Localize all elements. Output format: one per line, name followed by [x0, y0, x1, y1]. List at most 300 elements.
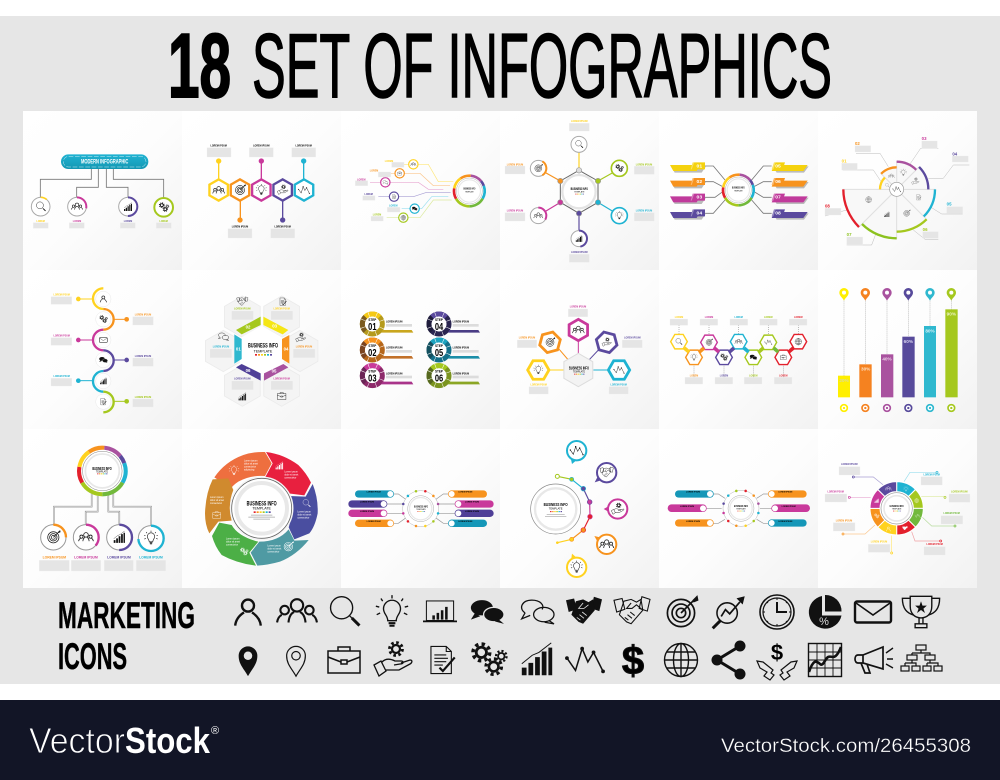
node: search	[31, 197, 50, 228]
captions: LOREM IPSUM	[610, 384, 627, 386]
connector lines	[54, 493, 151, 526]
center ring	[402, 490, 439, 527]
bar 80%: 80%	[925, 328, 936, 333]
captions	[505, 121, 654, 262]
step 03: 03	[368, 374, 377, 385]
panel 13: ring org tree	[39, 438, 166, 571]
petal captions: LOREM IPSUM	[234, 379, 251, 381]
icon: dollar: $	[622, 639, 644, 683]
captions: LOREM	[705, 317, 713, 319]
footer logo: ®	[211, 725, 219, 737]
segment: red	[265, 452, 311, 495]
leader lines	[825, 148, 969, 245]
colored arc	[557, 476, 590, 543]
icon: solid chat	[471, 600, 504, 624]
captions: LOREM IPSUM	[571, 252, 588, 254]
center disc	[230, 477, 293, 540]
captions: LOREM	[357, 179, 366, 181]
captions: LOREM IPSUM	[871, 542, 887, 544]
ribbon numbers: 07	[775, 195, 781, 201]
outer node: target	[527, 157, 549, 179]
node: gears: LOREM	[159, 221, 168, 223]
pills right	[448, 490, 494, 527]
petal captions: LOREM IPSUM	[273, 309, 290, 311]
icon: outline pin	[287, 646, 305, 676]
hexagon: hand gear	[595, 330, 618, 355]
end dots	[76, 297, 129, 404]
captions: LOREM	[373, 215, 381, 217]
bar 60%: 60%	[904, 339, 914, 344]
captions: LOREM IPSUM	[139, 556, 163, 560]
upper hexagons	[669, 331, 809, 353]
center text	[248, 343, 278, 356]
dotted leaders	[844, 301, 951, 376]
hexagon: team	[569, 319, 588, 341]
band numbers	[236, 323, 289, 374]
captions: LOREM	[779, 375, 788, 377]
hexagon: bulb	[525, 356, 552, 384]
icon: pie chart: %	[819, 616, 829, 628]
captions: LOREM IPSUM	[570, 307, 586, 309]
ribbon numbers: 08	[775, 210, 781, 216]
captions: LOREM IPSUM	[135, 315, 151, 317]
donut icons	[875, 486, 920, 531]
step 02: 02	[368, 348, 377, 359]
captions: LOREM IPSUM	[943, 513, 960, 515]
icon: hands with dollar	[757, 640, 797, 680]
captions: LOREM	[675, 317, 683, 319]
pill end caps	[700, 491, 778, 526]
panel backgrounds grid	[23, 111, 977, 588]
central hexagon	[558, 168, 601, 216]
node: search: LOREM	[36, 221, 45, 223]
bar 90%: 90%	[947, 312, 957, 317]
captions: LOREM	[385, 161, 393, 163]
pill labels	[680, 492, 796, 523]
center disc: BUSINESS INFO	[247, 501, 277, 508]
ring: business info: TEMPLATE	[465, 190, 475, 193]
white copy: dolor sit amet	[284, 473, 299, 476]
serpentine arcs and stems	[78, 288, 127, 412]
connector lines	[707, 494, 775, 523]
dotted leaders	[679, 325, 798, 377]
panel 10: radial hexagons	[517, 307, 642, 394]
step 03	[358, 362, 386, 390]
pills left	[348, 490, 394, 527]
white copy: consectetur	[244, 465, 256, 468]
panel 12: bar chart	[838, 288, 958, 411]
icon: solid handshake	[566, 597, 602, 624]
pill end caps	[380, 491, 462, 527]
left circle: BUSINESS INFO	[544, 502, 568, 508]
fan captions: 01	[842, 158, 847, 163]
center ring: BUSINESS INFO	[414, 504, 428, 508]
captions: LOREM IPSUM	[53, 294, 70, 296]
icon: team	[277, 599, 317, 622]
fan captions: 02	[855, 141, 860, 146]
connector lines	[705, 166, 772, 213]
ribbon numbers: 01	[697, 163, 702, 169]
step 03: STEP	[368, 369, 377, 374]
ribbon numbers: 03	[697, 195, 702, 201]
center ring: TEMPLATE	[734, 189, 744, 192]
panel 16: bubble arc	[531, 441, 627, 577]
bubble: hand gear	[604, 499, 627, 519]
band numbers: 02	[246, 325, 251, 330]
captions: LOREM	[720, 375, 728, 377]
captions: LOREM IPSUM	[636, 164, 652, 166]
captions: LOREM IPSUM	[951, 491, 968, 493]
icon discs	[96, 291, 111, 409]
pill labels: LOREM IPSUM	[686, 521, 700, 523]
icon: search	[331, 597, 359, 626]
panel 7: serpentine timeline	[51, 288, 153, 412]
hexagon: zigzag	[606, 356, 632, 384]
icon: gears	[473, 644, 507, 674]
spokes	[545, 152, 613, 232]
icon: bar growth	[522, 643, 552, 675]
captions	[51, 294, 153, 407]
icon: trophy	[902, 596, 940, 628]
row 1 left: modern infographic, hexagon chain, circuit lines	[31, 145, 491, 238]
central hexagon: TEMPLATE	[573, 371, 586, 374]
white copy: Lorem ipsum	[297, 510, 311, 513]
step labels: LOREM IPSUM	[453, 322, 469, 324]
connector lines	[387, 494, 455, 523]
step 02	[358, 336, 386, 364]
petal captions: LOREM IPSUM	[273, 379, 290, 381]
footer logo: Stock	[125, 720, 211, 761]
panel 14: arrow cycle	[205, 452, 318, 566]
step label lines	[386, 324, 479, 378]
panel 9: six step rings	[358, 310, 480, 390]
zigzag connectors	[684, 348, 793, 352]
left circle: TEMPLATE	[549, 506, 563, 510]
captions: LOREM IPSUM	[295, 145, 312, 147]
pill labels	[360, 492, 479, 523]
colored bands	[234, 317, 289, 381]
step labels: LOREM IPSUM	[386, 373, 402, 375]
row 2 right: radial hexagons, hexagon zigzag, bar chart	[517, 288, 958, 411]
connector lines	[40, 168, 164, 198]
center ring: TEMPLATE	[736, 508, 747, 511]
captions: LOREM	[690, 375, 698, 377]
step 06	[425, 362, 453, 390]
pill labels: LOREM IPSUM	[458, 492, 473, 494]
panel 3: circuit lines to ring	[355, 160, 491, 222]
step 01: 01	[368, 322, 377, 333]
outer node: team	[530, 208, 546, 224]
center text: TEMPLATE	[254, 349, 273, 353]
step 04	[425, 310, 453, 338]
icon: megaphone	[855, 647, 893, 673]
petal captions: LOREM IPSUM	[296, 347, 312, 349]
icon: clock	[760, 595, 794, 629]
leader lines	[843, 472, 955, 553]
heading: marketing icons: MARKETING	[58, 595, 195, 636]
captions: LOREM IPSUM	[507, 211, 523, 213]
icon: outline chat	[522, 600, 554, 624]
icon row 1	[235, 595, 940, 629]
banner: modern infographic: MODERN INFOGRAPHIC	[81, 160, 129, 166]
banner: modern infographic	[61, 154, 148, 169]
outer node: bars	[571, 231, 587, 247]
fan captions: 06	[923, 227, 928, 232]
segment: orange	[214, 452, 272, 488]
node: gears	[154, 198, 173, 228]
captions: LOREM IPSUM	[571, 121, 588, 123]
white copy: Lorem ipsum	[210, 496, 224, 499]
pill labels: LOREM IPSUM	[465, 502, 479, 504]
white copy: Lorem ipsum	[267, 545, 281, 548]
fan arcs	[843, 162, 935, 238]
center ring	[717, 168, 760, 212]
small nodes	[381, 160, 419, 222]
icon: pie chart	[809, 595, 842, 629]
white copy: Lorem ipsum	[284, 470, 298, 473]
fan captions: 05	[947, 202, 952, 207]
donut segments	[870, 482, 923, 535]
step labels: LOREM IPSUM	[453, 348, 469, 350]
leader dots	[842, 471, 956, 554]
captions: LOREM IPSUM	[636, 211, 652, 213]
captions: LOREM IPSUM	[923, 474, 940, 476]
icon row 2	[239, 639, 942, 683]
fan captions: 04	[952, 151, 958, 156]
central hexagon: BUSINESS INFO	[569, 366, 589, 371]
central hexagon: TEMPLATE	[574, 191, 585, 194]
node: team	[68, 197, 86, 228]
fan hub	[890, 182, 904, 196]
icon: hand with gear	[374, 642, 412, 676]
ribbon numbers: 02	[697, 179, 702, 185]
icon: target	[667, 596, 698, 627]
white copy: consectetur	[226, 543, 238, 546]
panel 4: hexagon hub	[505, 121, 654, 262]
bar 20%: 20%	[839, 378, 850, 383]
step labels: LOREM IPSUM	[386, 322, 402, 324]
central hexagon	[240, 326, 284, 376]
top ring: BUSINESS INFO	[92, 466, 112, 471]
captions: LOREM IPSUM	[624, 338, 641, 340]
captions: LOREM	[734, 317, 743, 319]
central hexagon	[564, 353, 593, 387]
row 3 left: org tree, arrow cycle, pill ring	[39, 438, 494, 571]
center disc: TEMPLATE	[252, 507, 272, 511]
pills right	[768, 490, 810, 527]
step labels: LOREM IPSUM	[386, 348, 402, 350]
node: target	[41, 525, 66, 550]
captions: LOREM IPSUM	[74, 556, 98, 560]
captions: LOREM IPSUM	[107, 556, 131, 560]
panel 5: ribbons around ring	[670, 162, 809, 220]
segment: blue	[289, 484, 318, 539]
ring: business info: BUSINESS INFO	[463, 187, 475, 191]
center text: BUSINESS INFO	[248, 343, 278, 350]
captions: LOREM IPSUM	[210, 145, 227, 147]
step 01	[358, 310, 386, 338]
panel 8: hexagon flower	[205, 296, 318, 406]
step 01: STEP	[368, 317, 377, 322]
captions	[355, 161, 404, 221]
ribbons right	[772, 162, 809, 220]
footer logo: Vector	[29, 720, 125, 761]
outer node: bulb	[611, 208, 627, 224]
ribbon numbers: 04	[697, 210, 702, 216]
hexagon: hand gear	[273, 179, 292, 201]
node: bulb	[138, 526, 164, 551]
fan icons	[866, 169, 921, 217]
center ring: BUSINESS INFO	[732, 186, 745, 190]
bubble: bulb	[567, 554, 586, 577]
step 05: STEP	[435, 343, 443, 348]
captions: LOREM IPSUM	[827, 491, 844, 493]
lower hexagons	[684, 347, 794, 368]
icon: outline handshake	[614, 597, 650, 624]
bar 30%: 30%	[861, 367, 871, 372]
icon: person	[235, 600, 261, 626]
icon: globe	[664, 644, 698, 676]
captions: LOREM IPSUM	[53, 335, 70, 337]
petal captions: LOREM IPSUM	[213, 347, 229, 349]
bubble: zigzag	[567, 441, 586, 464]
captions: LOREM IPSUM	[836, 520, 852, 522]
step 02: STEP	[368, 343, 377, 348]
fan captions: 08	[825, 204, 830, 209]
captions	[207, 145, 316, 238]
white copy: consectetur	[267, 551, 280, 554]
ring: business info	[448, 169, 491, 213]
donut centers	[843, 407, 952, 409]
icon: laptop	[423, 601, 457, 621]
icon: share	[712, 640, 746, 680]
hexagon: target	[538, 330, 562, 355]
icon: bulb	[376, 595, 408, 626]
captions: LOREM	[764, 317, 773, 319]
pill labels: LOREM IPSUM	[465, 511, 479, 513]
segment: ochre	[205, 478, 233, 533]
white copy: Lorem ipsum	[244, 459, 258, 462]
ribbon numbers	[697, 163, 781, 216]
title: 18	[168, 16, 231, 117]
band numbers: 06	[246, 368, 251, 373]
captions: LOREM IPSUM	[253, 145, 270, 147]
captions: LOREM	[370, 171, 378, 173]
panel 1: modern infographic tree	[31, 154, 173, 228]
captions	[825, 464, 970, 555]
left circle	[531, 484, 581, 534]
step labels: LOREM IPSUM	[453, 373, 469, 375]
pill labels: LOREM IPSUM	[680, 506, 694, 508]
captions: LOREM	[364, 194, 373, 196]
captions	[670, 317, 807, 384]
icon: mail	[855, 602, 891, 622]
ribbons left	[670, 162, 706, 220]
band numbers: 01	[236, 346, 241, 351]
node: team: LOREM	[73, 221, 81, 223]
panel 15: pill ring	[348, 490, 494, 527]
captions	[517, 307, 642, 394]
white copy: dolor sit amet	[297, 513, 312, 516]
panel 6: spiral fan	[825, 136, 969, 245]
white copy	[210, 459, 312, 554]
bottom donuts	[841, 405, 955, 411]
outer node: search	[571, 136, 587, 152]
center ring	[722, 490, 760, 527]
fan sectors	[843, 162, 935, 238]
donut center: BUSINESS INFO	[890, 504, 904, 508]
band numbers: 03	[272, 323, 278, 328]
petal icons	[218, 297, 306, 400]
pill labels: LOREM IPSUM	[367, 521, 381, 523]
panel 17: pill ring	[668, 490, 810, 527]
icon: org chart	[901, 645, 942, 671]
band numbers: 05	[272, 369, 277, 374]
icon: chart grid	[808, 644, 842, 676]
white copy: Lorem ipsum	[226, 537, 240, 540]
hexagon icons	[676, 338, 802, 360]
pill labels: LOREM IPSUM	[778, 492, 793, 494]
captions: LOREM IPSUM	[43, 556, 66, 560]
icon: zigzag	[566, 647, 604, 673]
icon: document	[431, 646, 455, 674]
captions: LOREM	[794, 317, 803, 319]
row 1 right: hexagon hub, ribbons, spiral fan	[505, 121, 969, 262]
top ring	[69, 438, 135, 504]
pill labels: LOREM IPSUM	[360, 502, 374, 504]
circuit lines	[370, 164, 453, 218]
step 06: STEP	[435, 369, 443, 374]
pill labels: LOREM IPSUM	[367, 492, 381, 494]
bar 40%: 40%	[882, 357, 893, 362]
step labels	[386, 322, 469, 375]
fan captions	[825, 136, 968, 245]
title	[168, 16, 832, 117]
icon: growth search	[713, 597, 744, 628]
hexagon: team	[209, 179, 228, 201]
petal captions	[210, 309, 315, 390]
ribbon numbers: 06	[775, 179, 781, 185]
donut center	[881, 493, 912, 524]
white copy: adipiscing	[244, 469, 255, 471]
captions: LOREM IPSUM	[135, 397, 151, 399]
heading: marketing icons: ICONS	[58, 636, 127, 677]
pill labels: LOREM IPSUM	[782, 506, 796, 508]
step 04: STEP	[435, 317, 443, 322]
donut center: TEMPLATE	[892, 508, 902, 511]
fan captions: 03	[922, 136, 927, 141]
center ring: TEMPLATE	[416, 508, 427, 511]
white copy: consectetur	[210, 502, 222, 505]
white copy: dolor sit amet	[244, 462, 258, 465]
captions: LOREM IPSUM	[530, 384, 547, 386]
node icons	[383, 163, 417, 220]
heading: marketing icons	[58, 595, 195, 677]
node: bars	[107, 525, 132, 550]
captions: LOREM IPSUM	[519, 338, 535, 340]
white icons	[213, 461, 310, 555]
white copy: consectetur	[284, 476, 297, 479]
icon: solid pin	[239, 646, 257, 676]
white copy: dolor sit amet	[210, 499, 224, 502]
icon: briefcase	[328, 647, 360, 673]
petals	[205, 296, 318, 406]
footer logo	[29, 720, 219, 761]
panel 11: hexagon zigzag	[669, 317, 809, 384]
pill labels: LOREM IPSUM	[360, 511, 374, 513]
band numbers: 04	[284, 346, 289, 351]
spokes	[550, 341, 608, 370]
